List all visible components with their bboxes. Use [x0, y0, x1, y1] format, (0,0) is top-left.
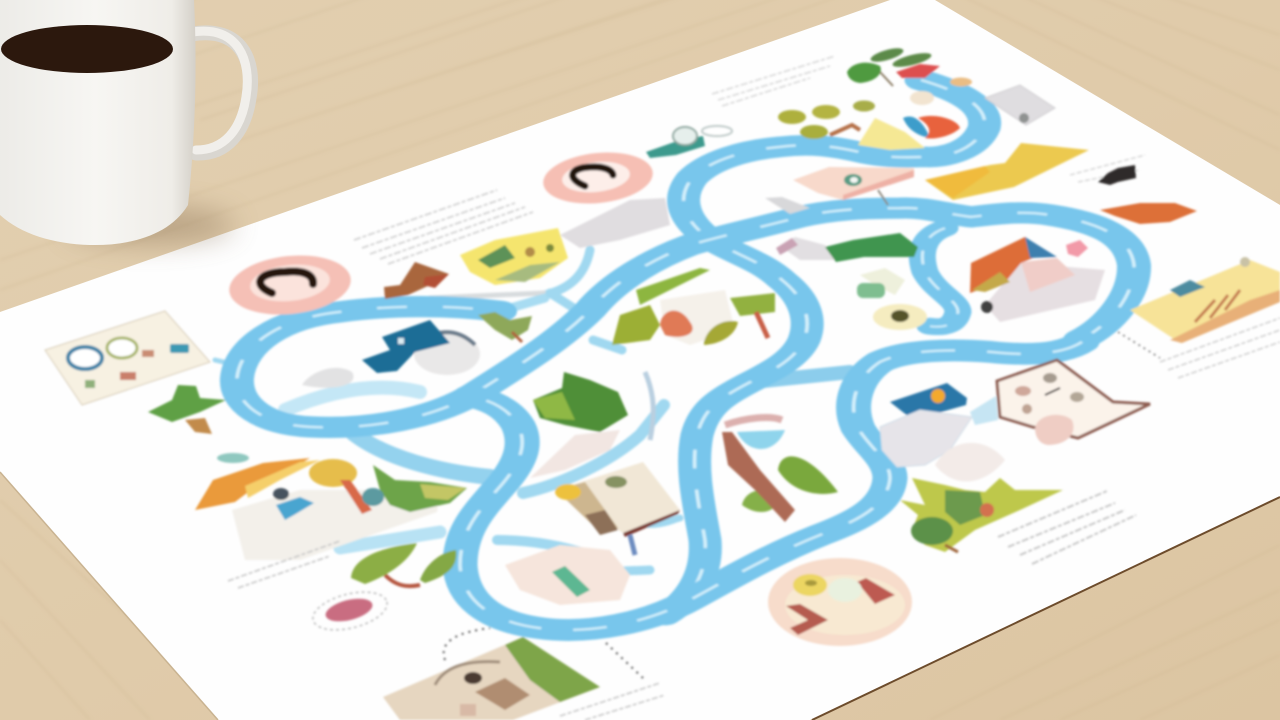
illustration: grey card [985, 85, 1055, 125]
coffee [1, 25, 173, 73]
illustration: bottom left building [195, 458, 467, 560]
illustration: grey blob [560, 198, 670, 248]
icon: pink badge left [226, 250, 354, 320]
road: main loop [237, 208, 1134, 427]
pale side channels [215, 250, 850, 575]
text block: lower right [998, 491, 1136, 564]
illustration: central tree [530, 372, 653, 478]
illustration: teal glyph top [646, 126, 732, 158]
icon: pink oval with dotted ring [309, 585, 391, 637]
illustration: yellow wedge [925, 143, 1089, 200]
illustration: central book [555, 462, 680, 555]
mug handle [192, 31, 251, 153]
dotted connector [444, 628, 643, 678]
illustration: left tree [148, 385, 226, 434]
coffee mug [0, 0, 251, 245]
illustration: open book [997, 360, 1150, 445]
river road network [237, 80, 1134, 630]
text block: under building [228, 541, 340, 588]
illustration: pink house [765, 167, 914, 214]
illustration: left card [45, 311, 210, 405]
road: top river [665, 80, 985, 615]
illustration: small tree [351, 543, 456, 586]
illustration: yellow card right [1130, 257, 1280, 343]
illustration: top right tree [847, 46, 940, 86]
icon: brown rocks [384, 262, 449, 299]
yellow tree [309, 459, 372, 514]
text block: bottom [560, 683, 665, 720]
illustration: blue card [890, 383, 967, 420]
illustration: pale map area with green panel [505, 545, 630, 605]
illustration: grey stain [880, 396, 1005, 481]
green tree [362, 465, 467, 512]
illustration: pale green scene [776, 233, 927, 330]
mug body [0, 0, 196, 245]
illustration: orange leaf [1100, 203, 1197, 224]
illustration: grey figure [302, 368, 354, 388]
illustration: leaf bundle [900, 478, 1063, 552]
small teal mark [217, 453, 249, 463]
blue figure [273, 488, 314, 520]
road: inner branch [922, 228, 958, 327]
illustration: olive dots and yellow hill [778, 100, 960, 150]
illustration: orange roof house [970, 237, 1105, 322]
illustration: small green shrub [478, 312, 532, 342]
illustration: yellow garden patch [460, 228, 568, 285]
illustration: reader under trees [612, 268, 775, 345]
illustration: pink circle with red shapes [768, 558, 912, 646]
illustration: blue house and sphere [362, 320, 480, 375]
icon: pink badge top [541, 147, 655, 209]
text block: right [1118, 318, 1280, 378]
illustration: tree with bridge [722, 418, 838, 522]
text block and black mark [1070, 155, 1145, 185]
road: lower loop [460, 342, 1082, 630]
illustration: bottom scene card [383, 637, 600, 720]
text block: top [712, 56, 835, 106]
illustration: small orange and cream marks [910, 78, 972, 105]
text block: upper left [354, 190, 533, 264]
